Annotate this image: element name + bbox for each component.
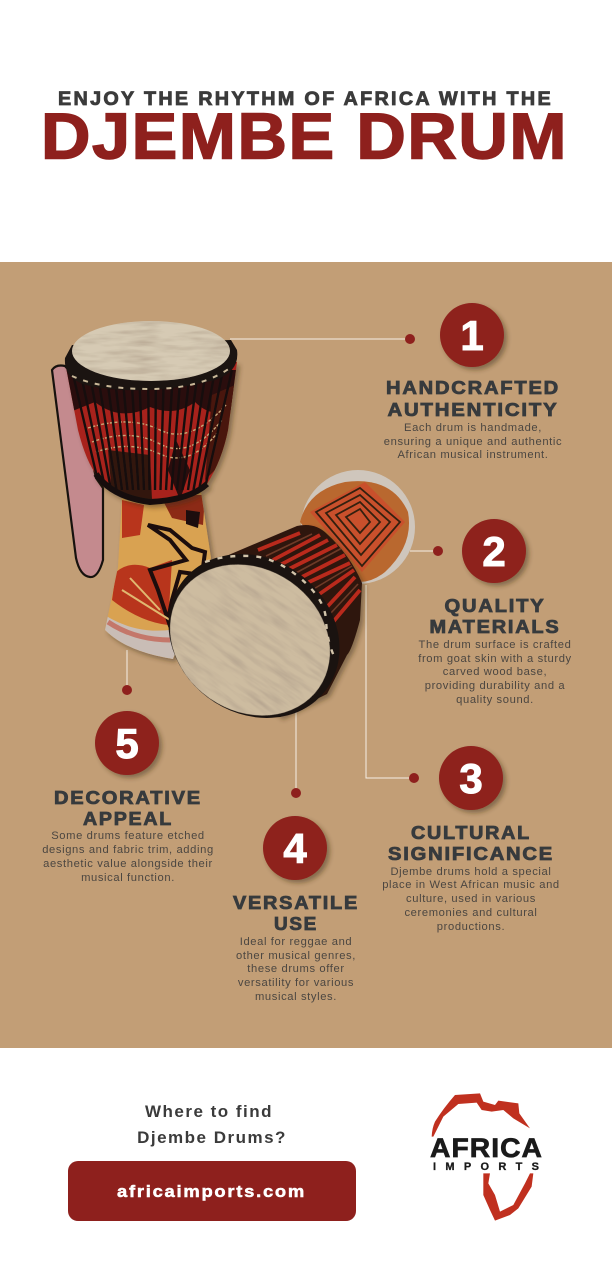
body 5 [42, 830, 214, 884]
number badge 1 [440, 303, 504, 367]
body 5: aesthetic value alongside their [43, 858, 213, 870]
number badge 4 [263, 816, 327, 880]
logo: Africa Imports: IMPORTS [433, 1161, 539, 1173]
item 3: cultural significance [382, 746, 560, 933]
logo wordmark: AFRICA [430, 1133, 543, 1163]
body 3: place in West African music and [382, 879, 560, 891]
body 3 [382, 866, 560, 933]
drum head [140, 534, 360, 746]
number badge 2 [462, 519, 526, 583]
carved wood base [100, 492, 211, 665]
body 2: The drum surface is crafted [419, 639, 571, 651]
heading 2: MATERIALS [430, 617, 560, 637]
body 4 [236, 936, 356, 1003]
drum body with ropes [60, 362, 240, 502]
heading 3: SIGNIFICANCE [388, 844, 554, 864]
body 4: versatility for various [238, 977, 354, 989]
button: website: africaimports.com [117, 1182, 306, 1201]
button: website [68, 1161, 356, 1221]
heading 5: APPEAL [83, 809, 173, 829]
body 3: Djembe drums hold a special [390, 866, 552, 878]
body 5: designs and fabric trim, adding [42, 844, 214, 856]
body 3: ceremonies and cultural [404, 907, 538, 919]
body 4: these drums offer [247, 963, 345, 975]
item 4: versatile use [233, 816, 359, 1003]
number badge 3 [439, 746, 503, 810]
body 1: Each drum is handmade, [404, 422, 542, 434]
heading 4: USE [274, 914, 318, 934]
drum rim [136, 520, 372, 752]
connector dots [122, 334, 443, 798]
item 1: handcrafted authenticity [384, 303, 562, 461]
heading 5 [54, 788, 202, 829]
heading 4: VERSATILE [233, 893, 359, 913]
item 2: quality materials [418, 519, 572, 706]
logo: Africa Imports [430, 1093, 543, 1221]
heading 2 [430, 596, 560, 637]
number badge 5 [95, 711, 159, 775]
heading 1: HANDCRAFTED [386, 378, 560, 398]
body 1: ensuring a unique and authentic [384, 436, 562, 448]
number badge 2: 2 [482, 528, 506, 575]
title: ENJOY THE RHYTHM OF AFRICA WITH THE [58, 89, 553, 110]
body 5: Some drums feature etched [51, 830, 205, 842]
drum body with ropes [205, 525, 362, 717]
heading 3: CULTURAL [411, 823, 531, 843]
body 1 [384, 422, 562, 461]
body 4: musical styles. [255, 991, 337, 1003]
heading 2: QUALITY [444, 596, 546, 616]
panel: tan background [0, 262, 612, 1048]
call to action text: Where to find [145, 1102, 273, 1121]
heading 1 [386, 378, 560, 420]
heading 4 [233, 893, 359, 934]
heading 3 [388, 823, 554, 864]
body 3: productions. [437, 921, 505, 933]
body 2: from goat skin with a sturdy [418, 653, 572, 665]
drum rim [65, 340, 237, 390]
drum strap [52, 366, 103, 577]
icon: upright djembe drum [52, 321, 240, 665]
body 1: African musical instrument. [397, 449, 549, 461]
connector lines [127, 339, 438, 793]
body 5: musical function. [81, 872, 175, 884]
body 3: culture, used in various [406, 893, 536, 905]
carved wood base [301, 470, 415, 584]
body 2: quality sound. [456, 694, 534, 706]
number badge 3: 3 [459, 755, 483, 802]
drum head [72, 321, 230, 381]
call to action text: Djembe Drums? [137, 1128, 287, 1147]
body 4: Ideal for reggae and [240, 936, 352, 948]
body 2: carved wood base, [443, 666, 547, 678]
call to action text [137, 1102, 287, 1147]
number badge 1: 1 [460, 312, 484, 359]
body 2 [418, 639, 572, 706]
africa outline [432, 1093, 533, 1221]
body 2: providing durability and a [425, 680, 565, 692]
body 4: other musical genres, [236, 950, 356, 962]
icon: tilted djembe drum [168, 470, 415, 722]
heading 5: DECORATIVE [54, 788, 202, 808]
item 5: decorative appeal [42, 711, 214, 884]
title: DJEMBE DRUM [41, 100, 568, 172]
number badge 4: 4 [283, 825, 307, 872]
heading 1: AUTHENTICITY [388, 400, 558, 420]
number badge 5: 5 [115, 720, 139, 767]
